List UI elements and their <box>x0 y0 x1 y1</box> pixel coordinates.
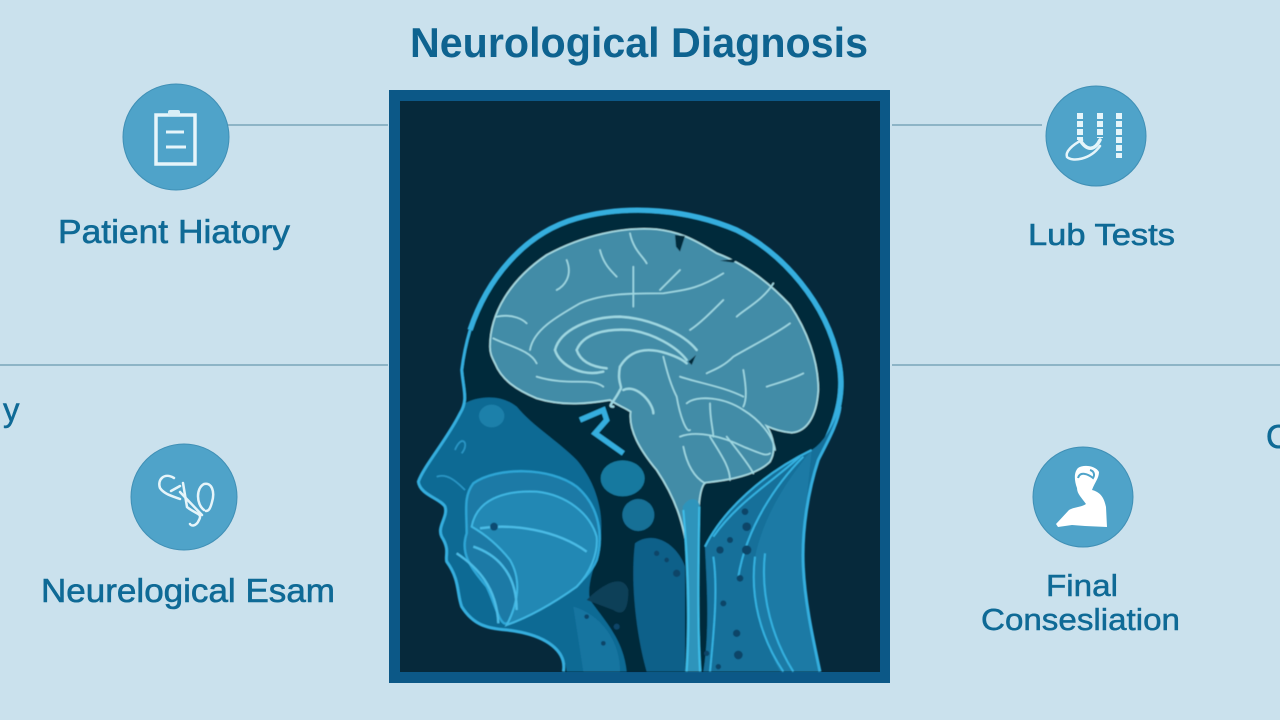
illustration: head MRI <box>418 208 845 672</box>
label: final consultation: Consesliation <box>981 602 1180 637</box>
title: Neurological Diagnosis <box>410 19 868 66</box>
step: final consultation <box>981 447 1180 637</box>
step: lab tests <box>1028 86 1175 252</box>
icon: lab tubes <box>1046 86 1146 186</box>
label: neurological exam: Neurelogical Esam <box>41 572 335 609</box>
spinal cord <box>683 499 702 672</box>
panel: head scan <box>389 90 890 683</box>
brain folds <box>493 233 803 483</box>
neck dots <box>584 508 751 669</box>
icon: reflex tool <box>131 444 237 550</box>
label: final consultation <box>981 568 1180 637</box>
step: neurological exam <box>41 444 335 609</box>
brain gaps <box>675 235 685 252</box>
vertebrae <box>601 460 645 496</box>
skull highlight <box>470 210 841 447</box>
head outline <box>418 330 840 672</box>
icon: clipboard <box>123 84 229 190</box>
label: final consultation: Final <box>1046 568 1118 603</box>
icon: seated person <box>1033 447 1133 547</box>
label: patient history: Patient Hiatory <box>58 213 291 250</box>
brain <box>490 229 818 557</box>
neck muscle <box>703 407 840 672</box>
head silhouette <box>418 208 845 672</box>
airway and tongue <box>465 471 600 624</box>
face tissue <box>418 397 627 672</box>
clipped text fragment left: y <box>3 391 20 428</box>
step: patient history <box>58 84 291 250</box>
label: lab tests: Lub Tests <box>1028 217 1175 252</box>
